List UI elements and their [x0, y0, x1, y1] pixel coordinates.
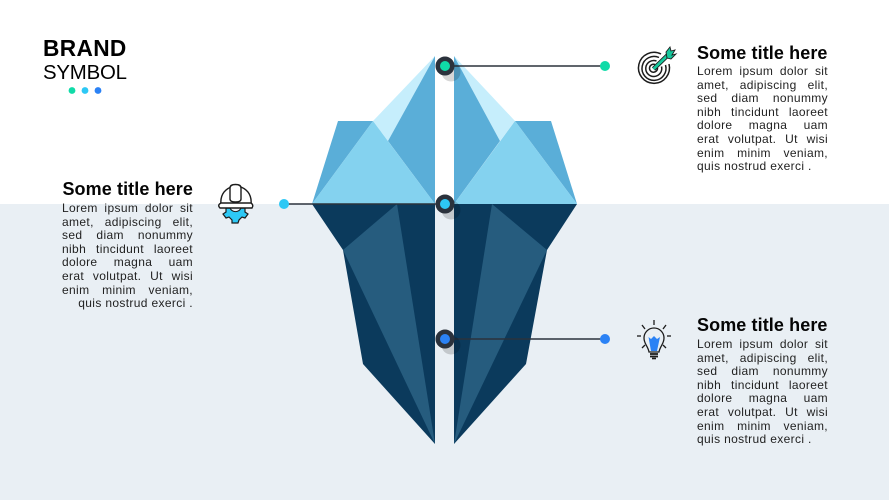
iceberg right below water: [454, 204, 577, 444]
brand dots: [69, 87, 101, 94]
text block: bottom right: sed diam nonummy: [697, 364, 828, 378]
iceberg right above water: [454, 56, 577, 204]
text block: top right: quis nostrud exerci .: [697, 159, 812, 173]
brand logo text: BRAND: [43, 35, 127, 61]
text block: middle left: amet, adipiscing elit,: [62, 215, 193, 229]
text block: top right: enim minim veniam,: [697, 146, 828, 160]
brand logo text: SYMBOL: [43, 62, 127, 84]
text block: top right: Lorem ipsum dolor sit: [697, 64, 828, 78]
connector: top right: [445, 61, 610, 71]
text block: middle left: quis nostrud exerci .: [78, 296, 193, 310]
connector: middle left: [279, 199, 445, 209]
text block: bottom right: amet, adipiscing elit,: [697, 351, 828, 365]
icon: target with dart: [638, 47, 676, 83]
node: bottom: [438, 332, 460, 354]
text block: top right: erat volutpat. Ut wisi: [697, 132, 828, 146]
icon: light bulb: [637, 320, 671, 358]
icon: helmet with gear: [219, 184, 253, 223]
text block: bottom right: dolore magna uam: [697, 391, 828, 405]
connector: bottom right: [445, 334, 610, 344]
text block: middle left: sed diam nonummy: [62, 228, 193, 242]
brand logo text: [43, 35, 127, 84]
text block: middle left: Lorem ipsum dolor sit: [62, 201, 193, 215]
text block: top right: nibh tincidunt laoreet: [697, 105, 828, 119]
text block: bottom right: erat volutpat. Ut wisi: [697, 405, 828, 419]
text block: bottom right: quis nostrud exerci .: [697, 432, 812, 446]
text block: bottom right: enim minim veniam,: [697, 419, 828, 433]
text block: top right: amet, adipiscing elit,: [697, 78, 828, 92]
text block: bottom right: Some title here: [697, 315, 828, 335]
text block: top right: [697, 43, 828, 173]
text block: bottom right: [697, 315, 828, 446]
iceberg left above water: [312, 56, 435, 204]
text block: top right: Some title here: [697, 43, 828, 63]
text block: middle left: erat volutpat. Ut wisi: [62, 269, 193, 283]
text block: middle left: [62, 179, 193, 310]
text block: top right: sed diam nonummy: [697, 91, 828, 105]
iceberg left below water: [312, 204, 435, 444]
text block: middle left: nibh tincidunt laoreet: [62, 242, 193, 256]
text block: top right: dolore magna uam: [697, 118, 828, 132]
text block: middle left: enim minim veniam,: [62, 283, 193, 297]
text block: middle left: Some title here: [62, 179, 193, 199]
node: top: [438, 59, 460, 82]
node: middle: [438, 197, 460, 220]
text block: bottom right: nibh tincidunt laoreet: [697, 378, 828, 392]
text block: bottom right: Lorem ipsum dolor sit: [697, 337, 828, 351]
text block: middle left: dolore magna uam: [62, 255, 193, 269]
